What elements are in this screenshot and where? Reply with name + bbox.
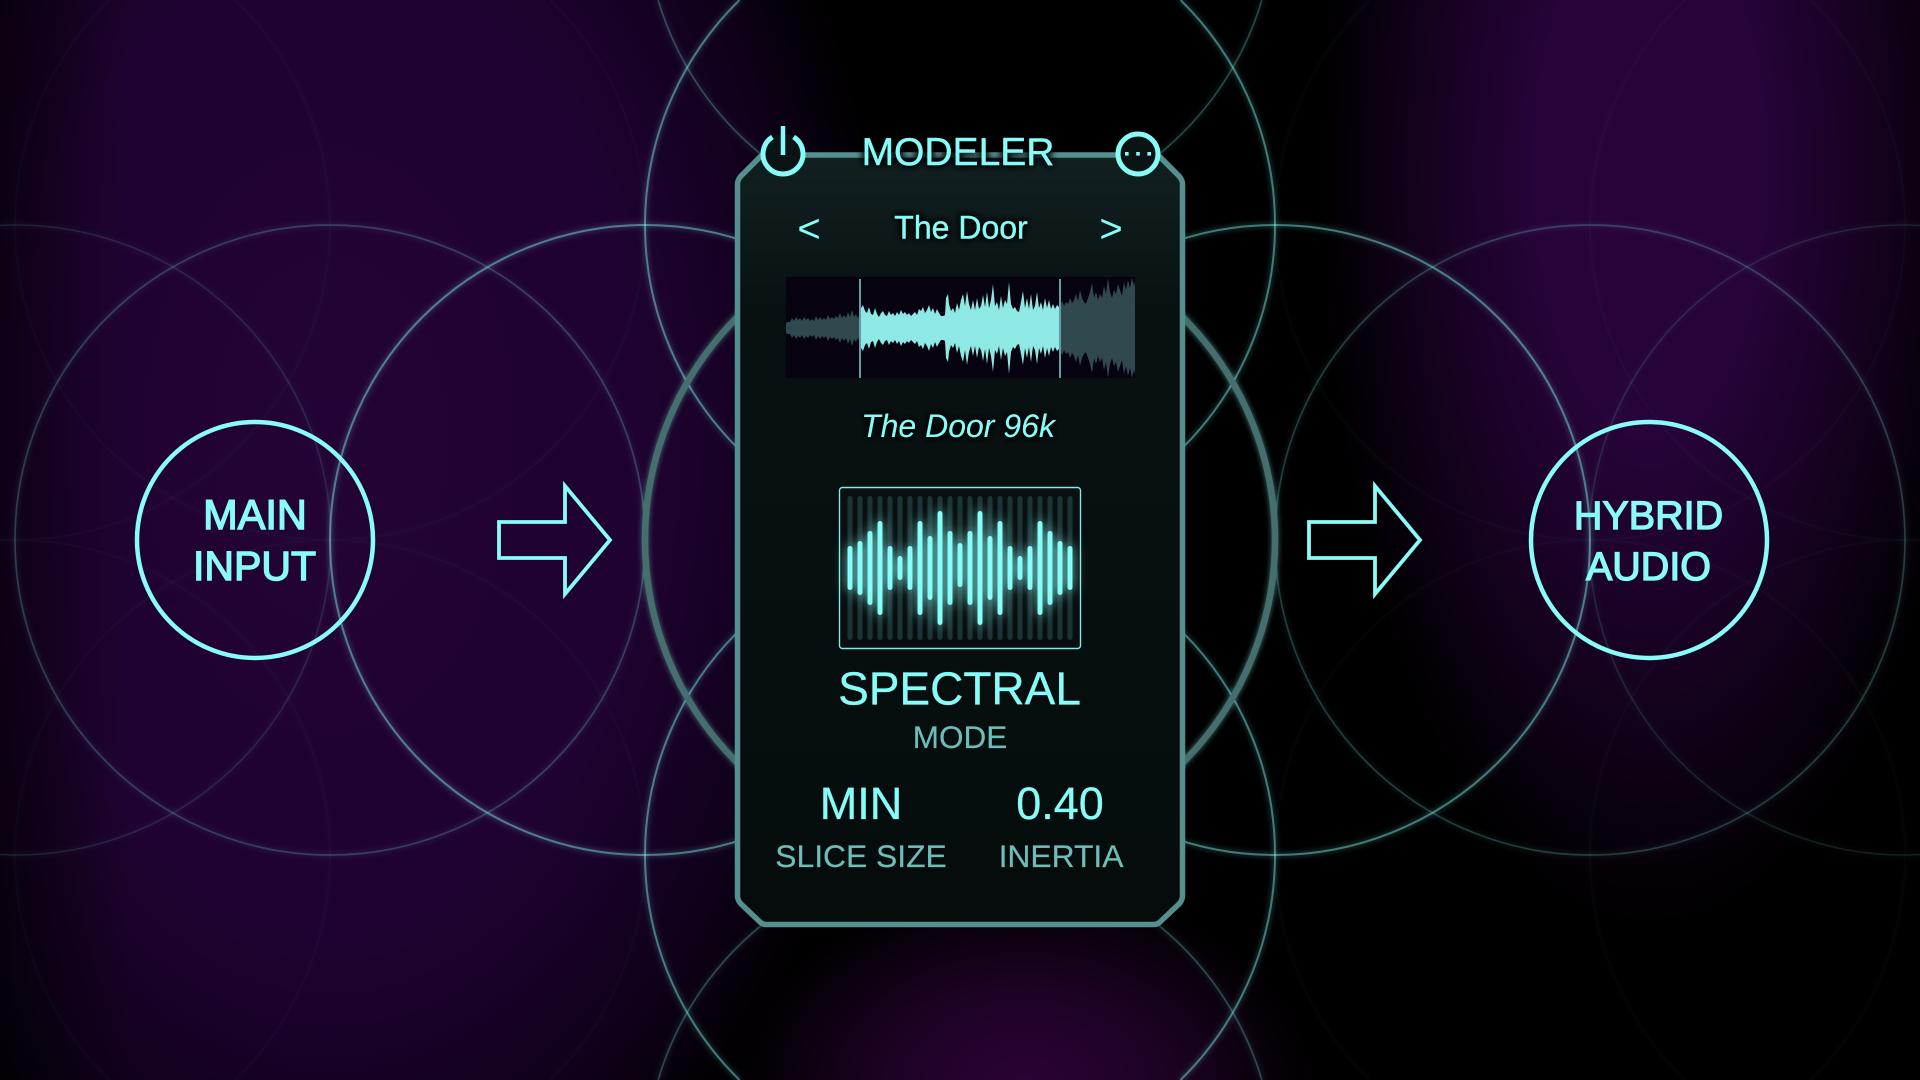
- waveform display: [786, 277, 1135, 378]
- output node: hybrid audio: AUDIO: [1586, 545, 1711, 589]
- parameter: slice size: [775, 778, 947, 874]
- panel: modeler: [738, 126, 1182, 924]
- input node: main input: MAIN: [203, 491, 307, 538]
- input node: main input: INPUT: [193, 543, 316, 589]
- mode value: MODE: [913, 719, 1007, 755]
- panel frame: [738, 155, 1182, 924]
- parameter: inertia: INERTIA: [999, 838, 1124, 874]
- mode value: SPECTRAL: [838, 662, 1081, 714]
- output node: hybrid audio: [1531, 422, 1767, 658]
- icon: power: [763, 126, 803, 174]
- heading: modeler: MODELER: [862, 131, 1054, 174]
- parameter: inertia: 0.40: [1016, 778, 1104, 829]
- preset selector: >: [1099, 207, 1123, 251]
- parameter: slice size: MIN: [820, 778, 902, 829]
- preset selector: <: [797, 207, 821, 251]
- arrow: input to modeler: [499, 486, 610, 594]
- parameter: slice size: SLICE SIZE: [775, 838, 947, 874]
- icon: more menu: [1118, 134, 1158, 174]
- arrow: modeler to output: [1309, 486, 1420, 594]
- mode value: [838, 662, 1081, 755]
- preset selector: [797, 207, 1123, 251]
- preset selector: The Door: [894, 210, 1028, 246]
- sample name: The Door 96k: [861, 408, 1057, 444]
- parameter: inertia: [999, 778, 1124, 874]
- output node: hybrid audio: HYBRID: [1574, 494, 1723, 538]
- mode icon: spectral bars: [840, 488, 1080, 648]
- input node: main input: [137, 422, 373, 658]
